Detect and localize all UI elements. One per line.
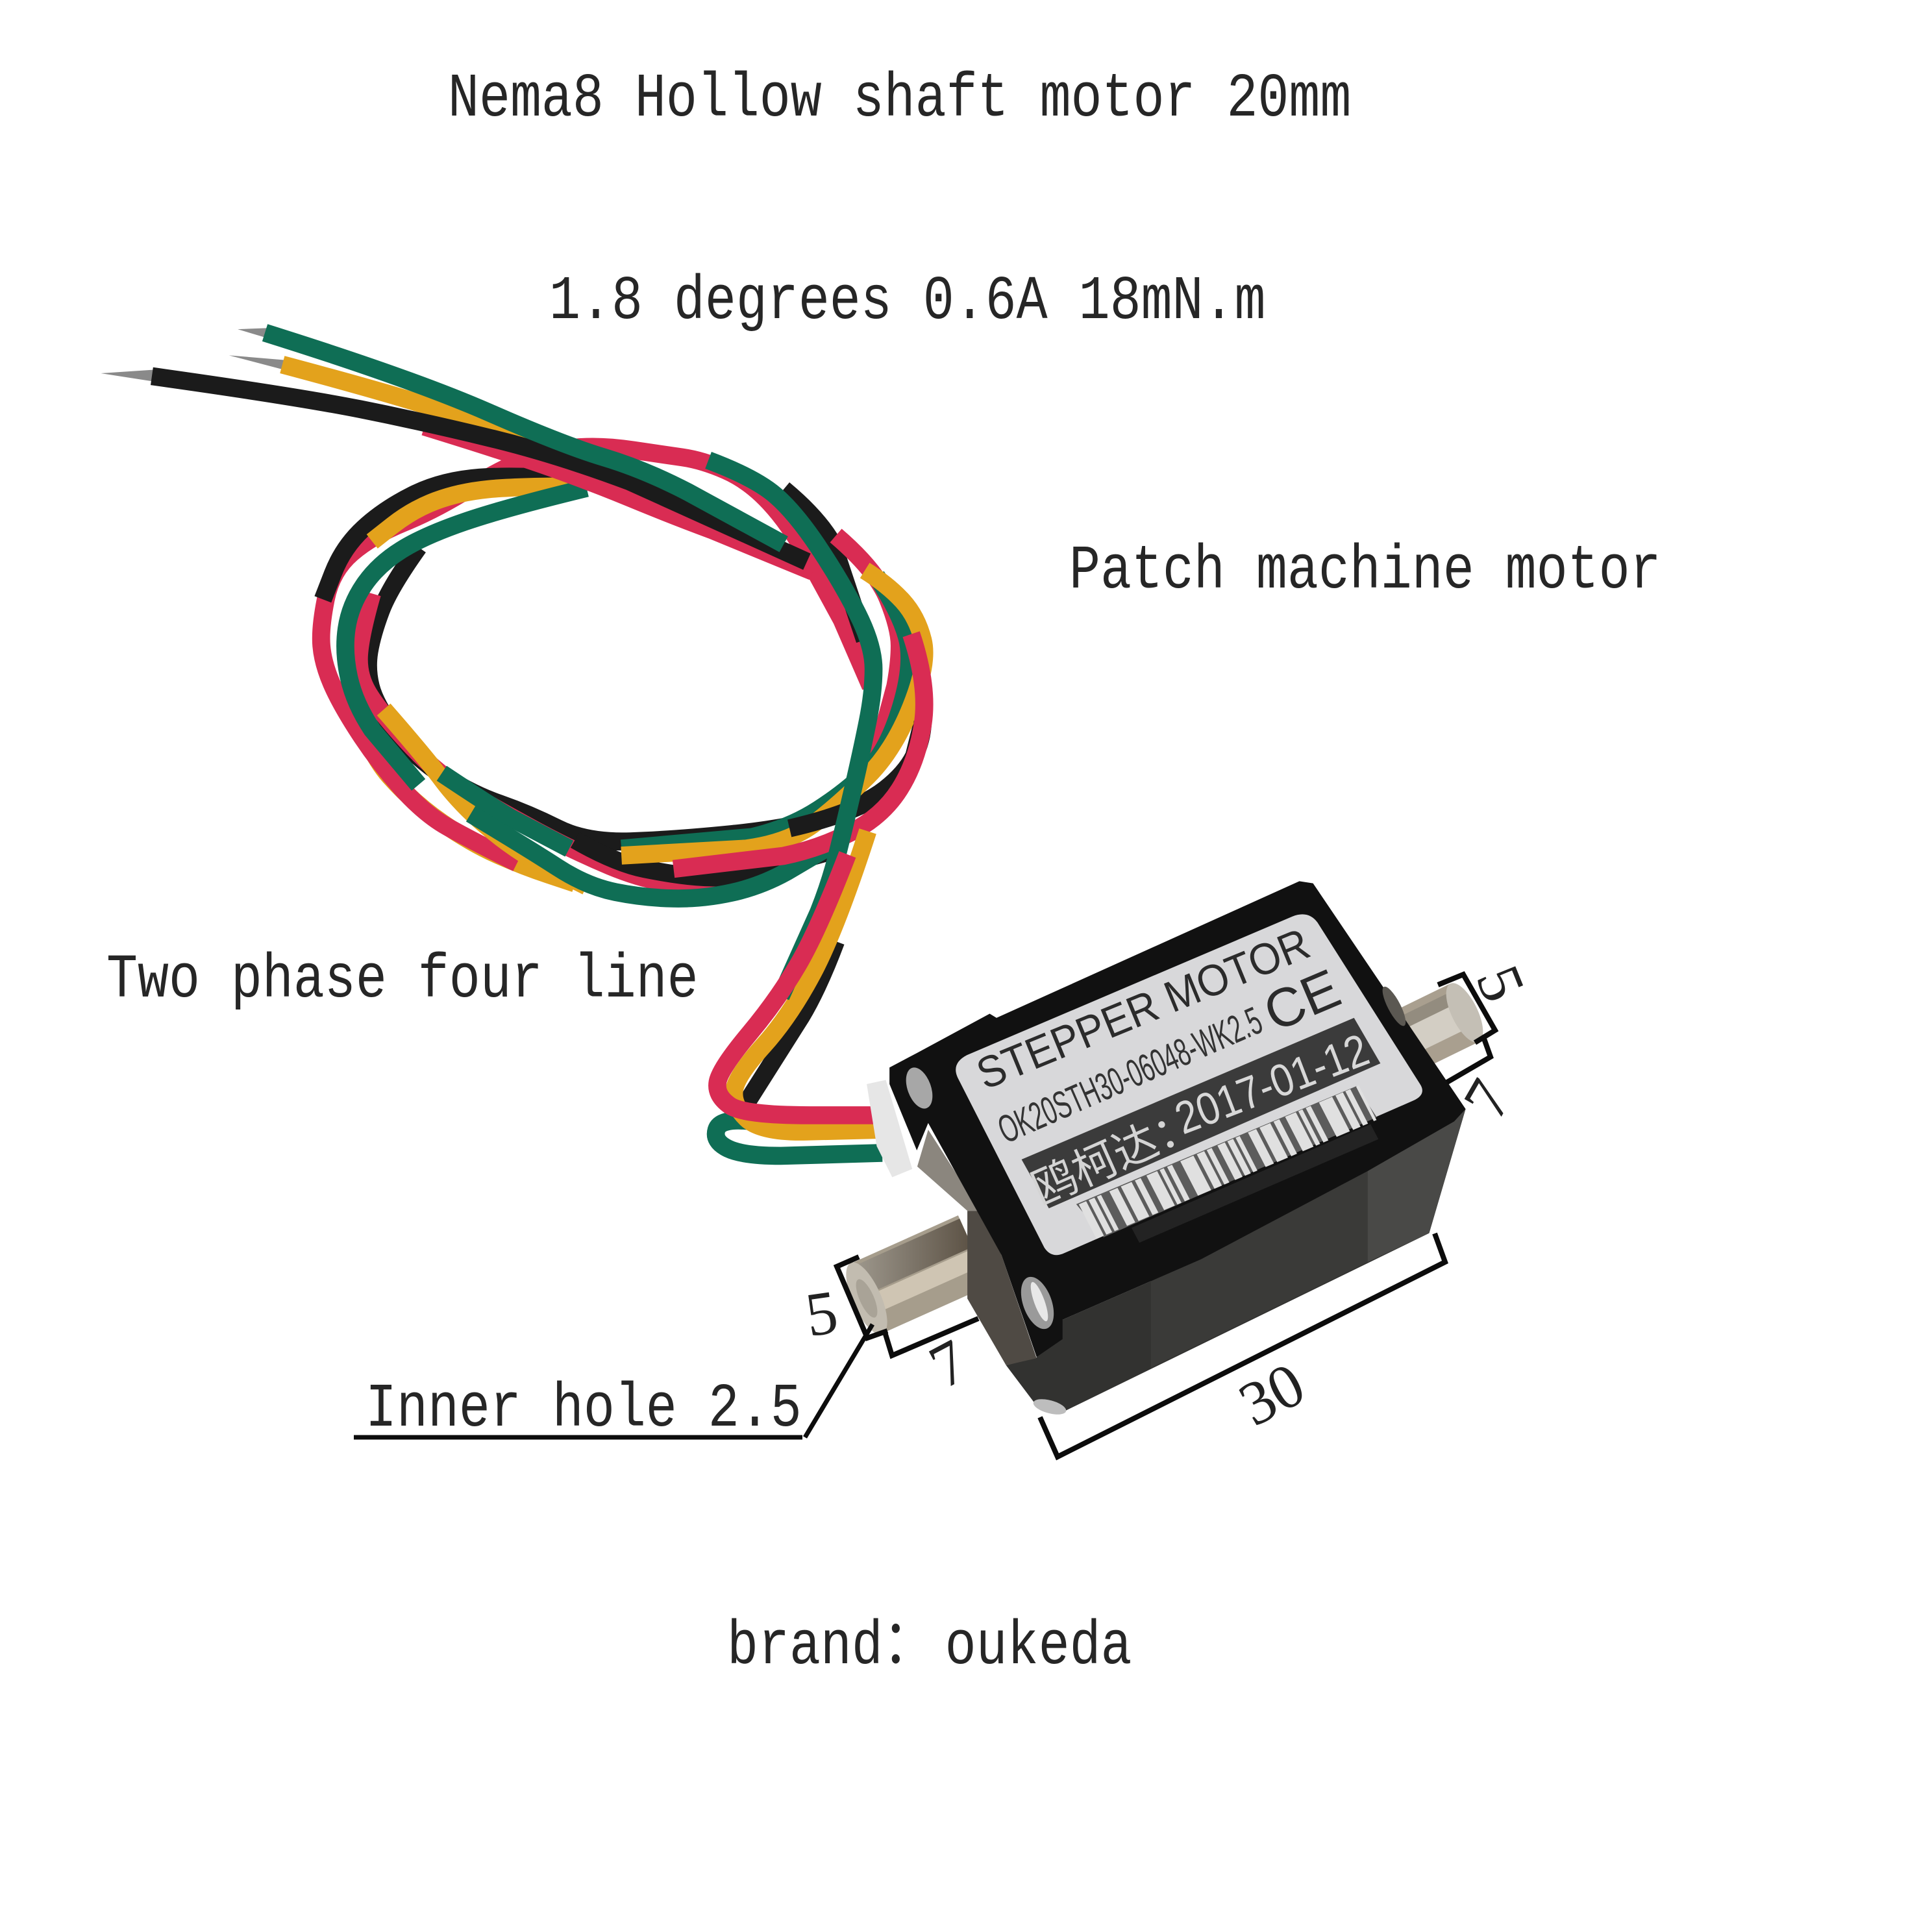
right shaft	[1402, 978, 1491, 1048]
callout: inner hole 2.5	[354, 1324, 873, 1444]
dimension: 30 bracket: 30	[1228, 1349, 1315, 1439]
dimension: right shaft 5	[1438, 956, 1539, 1043]
label text: CE mark: CE	[1255, 957, 1348, 1043]
dimension: left shaft 5: 5	[801, 1276, 842, 1350]
wire strands: lower band and right side	[471, 489, 924, 898]
right flange disc	[1378, 984, 1410, 1028]
dimension: left shaft 5	[801, 1257, 887, 1350]
label: brand: brand：oukeda	[727, 1611, 1132, 1682]
label text: brand in Chinese: 鸥柯达：	[1024, 1098, 1206, 1215]
left shaft	[837, 1233, 977, 1340]
dimension: right shaft 5: 5	[1463, 956, 1539, 1011]
label text: date: 2017-01-12	[1168, 1024, 1376, 1144]
label sticker	[956, 914, 1422, 1255]
motor top face	[889, 881, 1466, 1357]
dimension: right shaft 7	[1447, 1039, 1525, 1130]
dimension: left shaft 7: 7	[918, 1326, 978, 1402]
date band	[1022, 1018, 1380, 1208]
dimension: 30 bracket	[1040, 1233, 1445, 1457]
specification line: 1.8 degrees 0.6A 18mN.m	[549, 266, 1265, 337]
wire strands: lead to motor connector	[708, 460, 882, 1156]
callout: inner hole 2.5: Inner hole 2.5	[365, 1374, 802, 1444]
wire strands: rear layer	[321, 447, 923, 886]
motor side face	[1006, 1109, 1466, 1413]
stepper motor	[837, 881, 1491, 1417]
wire strands: leads to stripped tips	[152, 333, 813, 571]
motor front flange	[917, 1130, 1037, 1365]
label: patch machine motor: Patch machine motor	[1069, 536, 1661, 606]
label text: stepper motor: STEPPER MOTOR	[970, 919, 1317, 1099]
label text: model number: OK20STH30-06048-WK2.5	[991, 998, 1269, 1152]
screws	[901, 1064, 1068, 1417]
title: Nema8 Hollow shaft motor 20mm	[448, 64, 1351, 134]
label: two phase four line: Two phase four line	[106, 945, 699, 1015]
stripped wire tips	[101, 328, 284, 382]
barcode	[1076, 1086, 1377, 1237]
connector	[867, 1080, 912, 1177]
four-colour twisted wire loop	[101, 328, 924, 1156]
dimension: right shaft 7: 7	[1450, 1068, 1525, 1130]
dimension: left shaft 7	[885, 1319, 978, 1402]
